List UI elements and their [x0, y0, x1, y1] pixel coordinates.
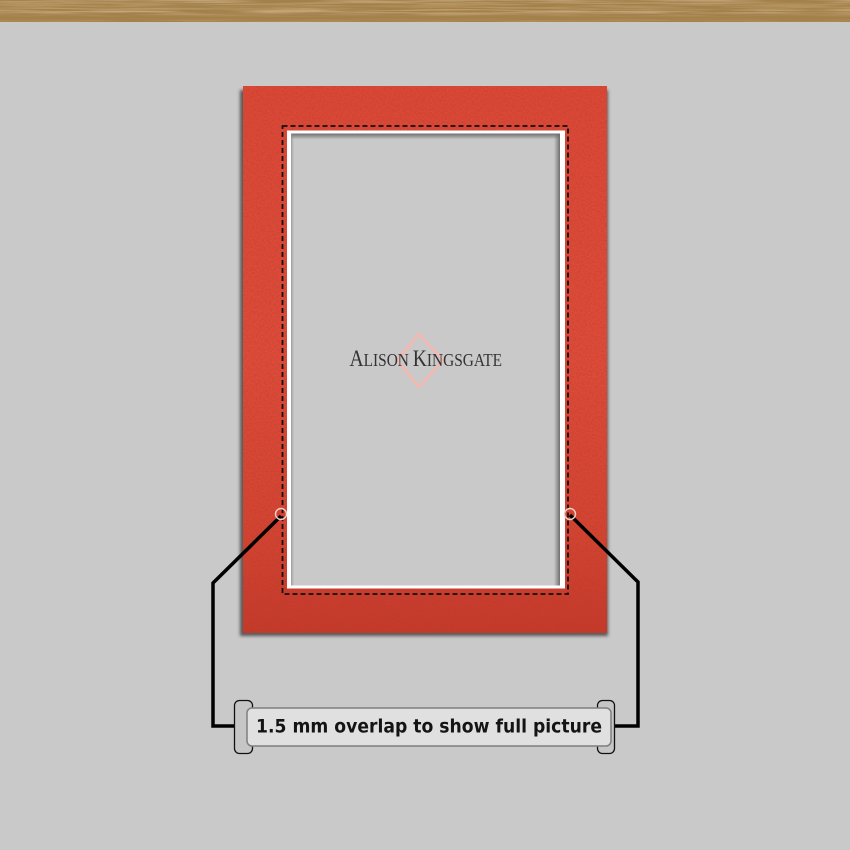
white window bevel	[287, 130, 565, 588]
label text: 1.5 mm overlap to show full picture	[256, 716, 602, 738]
window opening	[291, 134, 560, 586]
window right shadow	[554, 134, 560, 586]
right marker circle	[564, 508, 576, 520]
left leader line	[213, 508, 286, 726]
left tab	[234, 700, 252, 754]
right leader line	[564, 508, 638, 726]
label plate	[247, 708, 611, 746]
wooden shelf strip	[0, 0, 850, 22]
right tab	[598, 700, 614, 754]
left marker circle	[276, 508, 286, 520]
logo diamond	[397, 334, 443, 387]
callout label	[234, 700, 614, 754]
window left shadow	[291, 134, 294, 586]
window top shadow	[291, 134, 560, 140]
logo wordmark: ALISON KINGSGATE	[350, 346, 502, 371]
dashed overlap outline	[282, 126, 568, 594]
panel: red mat board	[240, 86, 608, 636]
logo: Alison Kingsgate	[350, 334, 502, 387]
